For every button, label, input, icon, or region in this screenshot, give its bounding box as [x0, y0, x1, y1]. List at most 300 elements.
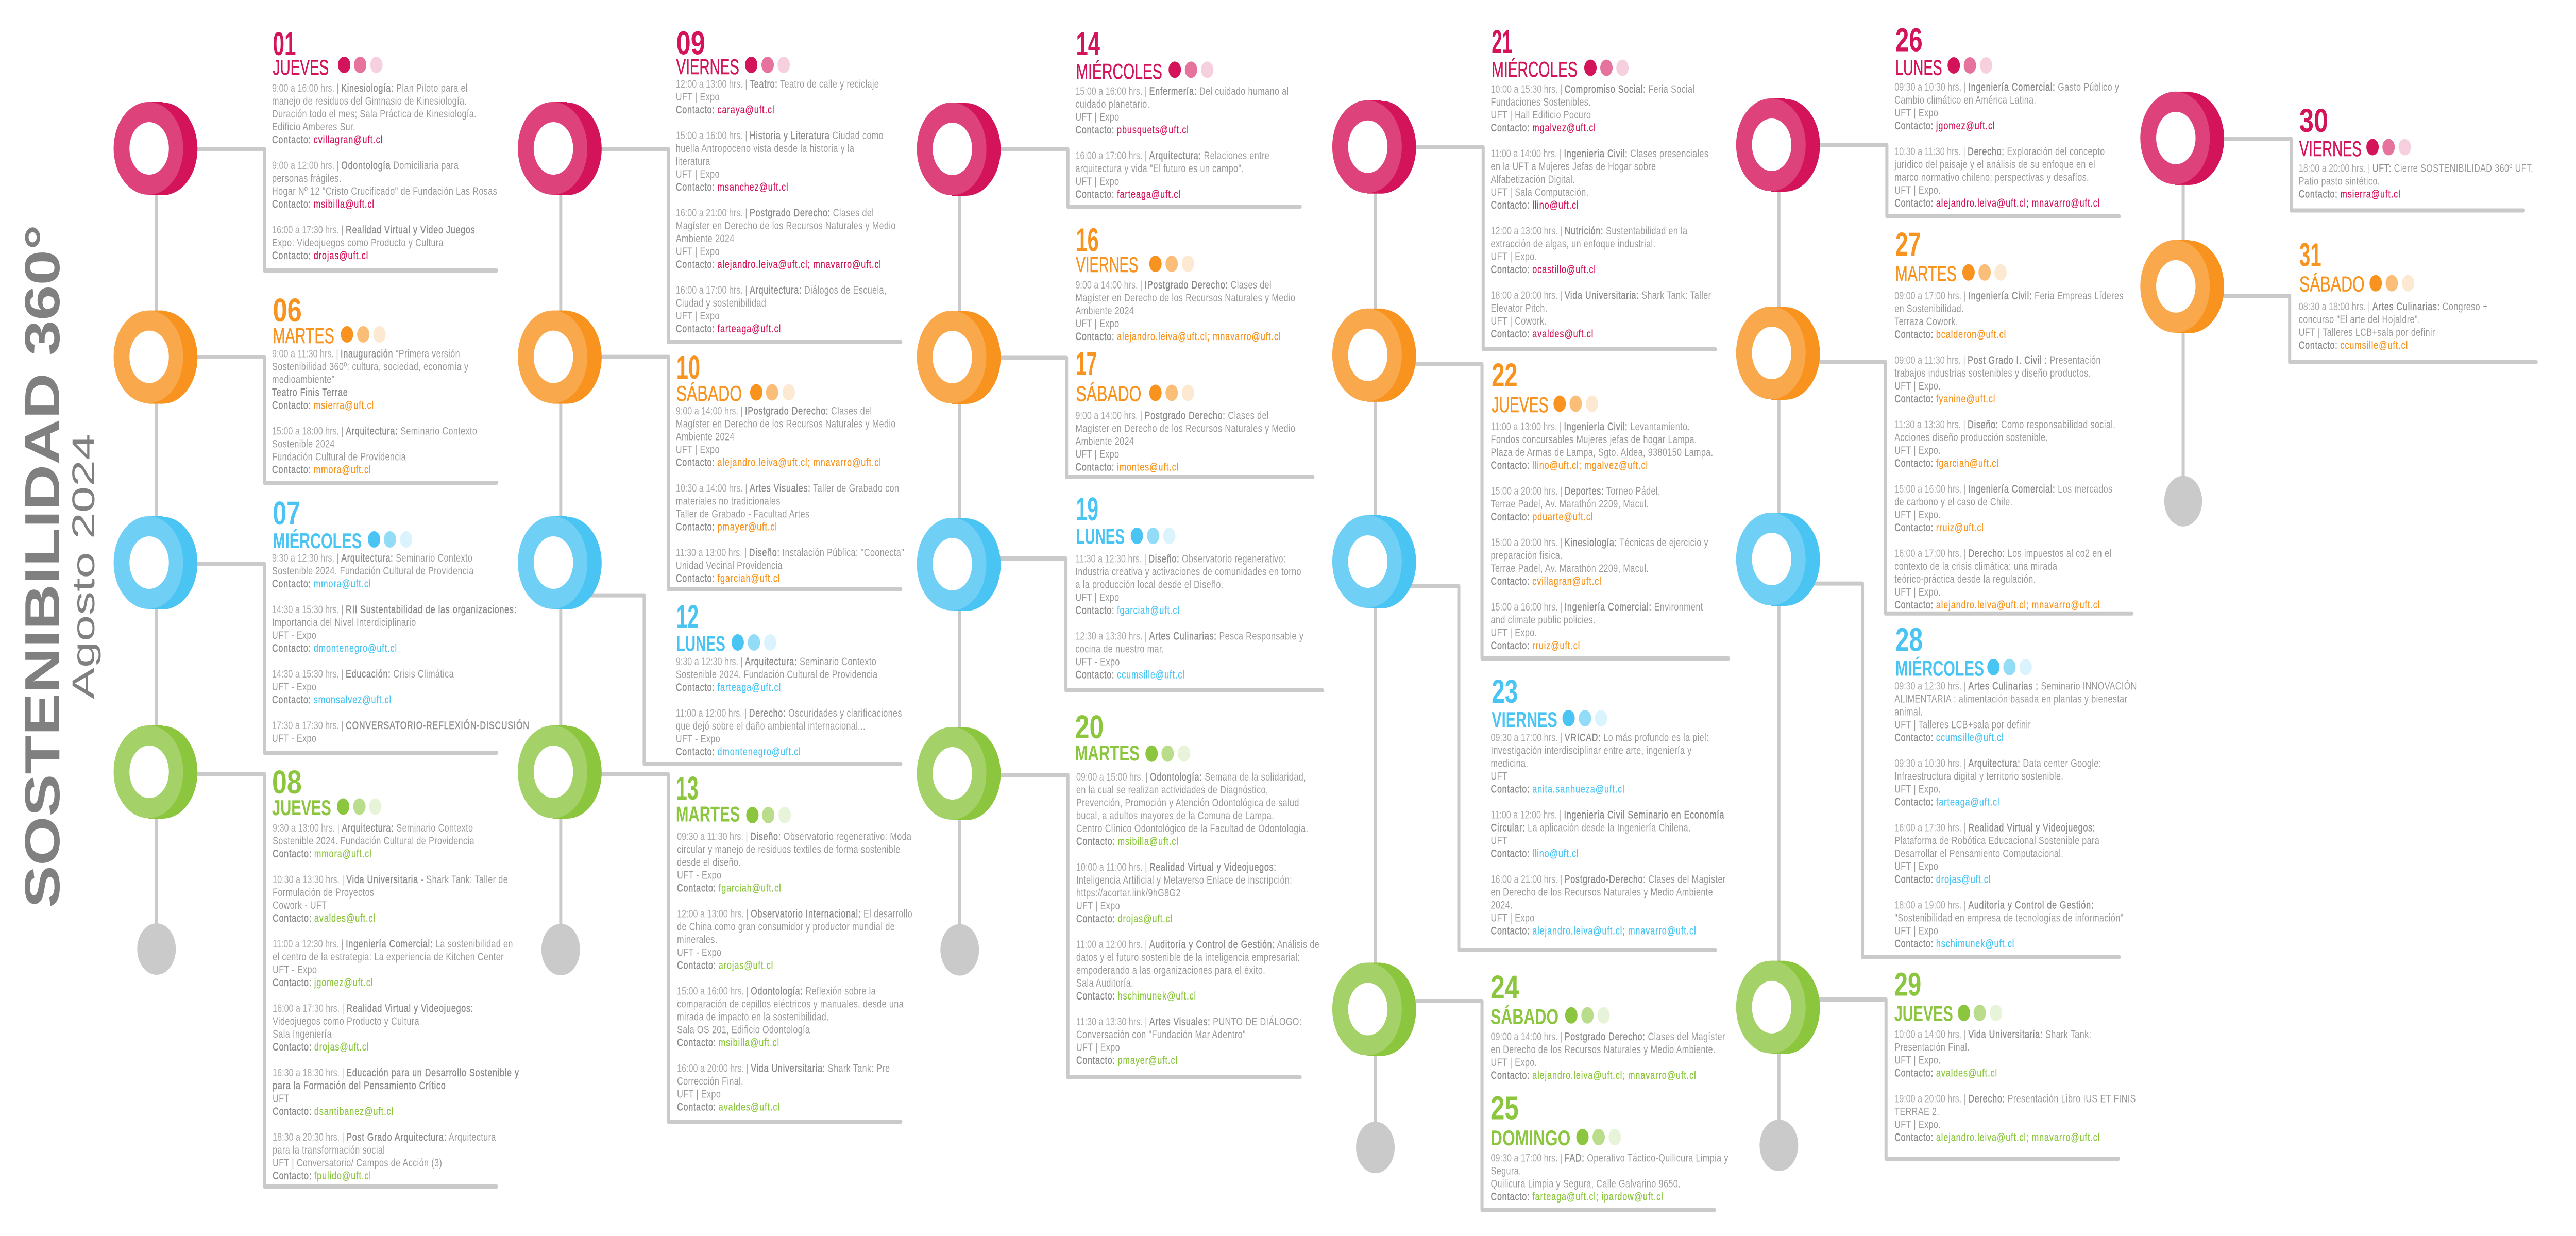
dots	[1947, 57, 1992, 74]
connector: day 12	[580, 596, 901, 764]
date number: 14	[1076, 25, 1100, 62]
schedule text: circular y manejo de residuos textiles de forma sostenible	[677, 843, 901, 856]
schedule text: UFT | Expo.	[1894, 380, 1941, 393]
date number: 28	[1895, 621, 1923, 658]
day 13	[676, 770, 915, 1113]
day 28	[1894, 621, 2140, 950]
day 29	[1894, 966, 2139, 1144]
schedule text: UFT - Expo	[273, 964, 317, 976]
schedule text: Duración todo el mes; Sala Práctica de Kinesiología.	[272, 108, 477, 121]
dots	[1987, 659, 2032, 675]
date number: 26	[1895, 22, 1923, 58]
schedule text: Contacto: hschimunek@uft.cl	[1894, 938, 2014, 950]
schedule text: UFT | Expo.	[1491, 251, 1537, 263]
schedule text: Contacto: anita.sanhueza@uft.cl	[1491, 784, 1625, 795]
date number: 20	[1075, 708, 1104, 746]
schedule text: Cambio climático en América Latina.	[1894, 94, 2036, 107]
schedule text: Conversación con "Fundación Mar Adentro"	[1076, 1029, 1246, 1041]
schedule text: Taller de Grabado - Facultad Artes	[676, 508, 809, 520]
schedule text: huella Antropoceno vista desde la historia y la	[676, 143, 854, 155]
connector: day 07	[185, 564, 497, 753]
schedule text: en Derecho de los Recursos Naturales y Medio Ambiente.	[1491, 1044, 1716, 1056]
schedule text: 12:00 a 13:00 hrs. | Observatorio Internacional: El desarrollo	[677, 908, 912, 920]
day 14	[1075, 25, 1291, 200]
schedule text: 15:00 a 16:00 hrs. | Ingeniería Comercial: Los mercados	[1894, 483, 2112, 496]
schedule text: 12:00 a 13:00 hrs. | Teatro: Teatro de calle y reciclaje	[676, 78, 879, 91]
icon: pink ring	[917, 103, 1001, 196]
schedule text: UFT | Expo	[676, 246, 720, 258]
schedule text: Sostenible 2024. Fundación Cultural de Providencia	[273, 835, 474, 848]
weekday: MARTES	[273, 324, 334, 348]
dots	[1149, 256, 1194, 272]
connector: day 01	[185, 149, 497, 270]
schedule text: Corrección Final.	[677, 1075, 743, 1088]
schedule text: Contacto: alejandro.leiva@uft.cl; mnavarro@uft.cl	[676, 259, 882, 271]
schedule text: en Sostenibilidad.	[1894, 303, 1964, 315]
schedule text: Sala Auditoría.	[1076, 977, 1133, 990]
schedule text: concurso "El arte del Hojaldre".	[2299, 314, 2420, 326]
schedule text: Contacto: alejandro.leiva@uft.cl; mnavarro@uft.cl	[676, 456, 882, 469]
dots	[2369, 275, 2414, 292]
icon: orange ring	[1332, 309, 1416, 402]
schedule text: Presentación Final.	[1894, 1041, 1970, 1054]
icon: green ring	[1332, 962, 1416, 1056]
schedule text: 18:30 a 20:30 hrs. | Post Grado Arquitectura: Arquitectura	[273, 1131, 496, 1144]
dots	[746, 807, 791, 823]
weekday: LUNES	[676, 631, 725, 656]
schedule text: Contacto: farteaga@uft.cl	[676, 682, 781, 694]
schedule text: Contacto: imontes@uft.cl	[1075, 462, 1179, 473]
schedule text: empoderando a las organizaciones para el éxito.	[1076, 964, 1265, 977]
schedule text: Segura.	[1491, 1165, 1521, 1177]
icon: green ring	[917, 727, 1001, 820]
schedule text: marco normativo chileno: perspectivas y desafíos.	[1894, 172, 2089, 184]
schedule text: 9:30 a 13:00 hrs. | Arquitectura: Seminario Contexto	[273, 822, 473, 835]
day 01	[272, 25, 500, 262]
date number: 16	[1076, 222, 1099, 258]
schedule text: Contacto: farteaga@uft.cl	[1075, 189, 1181, 200]
schedule text: UFT | Conversatorio/ Campos de Acción (3)	[273, 1157, 442, 1170]
schedule text: Contacto: alejandro.leiva@uft.cl; mnavarro@uft.cl	[1894, 197, 2100, 210]
day 16	[1075, 222, 1298, 343]
icon: pink ring	[518, 102, 602, 195]
icon: pink ring	[1332, 100, 1416, 194]
dots	[750, 384, 795, 401]
schedule text: en la UFT a Mujeres Jefas de Hogar sobre	[1491, 161, 1656, 173]
weekday: JUEVES	[273, 55, 329, 79]
schedule text: 9:00 a 12:00 hrs. | Odontología Domiciliaria para	[272, 160, 459, 172]
schedule text: 10:00 a 15:30 hrs. | Compromiso Social: Feria Social	[1491, 83, 1694, 96]
weekday: DOMINGO	[1490, 1126, 1570, 1150]
schedule text: 09:30 a 11:30 hrs. | Diseño: Observatorio regenerativo: Moda	[677, 831, 911, 843]
schedule text: Industria creativa y activaciones de comunidades en torno	[1075, 566, 1301, 578]
schedule text: UFT | Expo	[677, 1088, 721, 1100]
weekday: VIERNES	[1076, 252, 1138, 277]
schedule text: Contacto: mgalvez@uft.cl	[1491, 122, 1596, 134]
weekday: LUNES	[1076, 524, 1125, 549]
schedule text: 15:00 a 20:00 hrs. | Kinesiología: Técnicas de ejercicio y	[1491, 537, 1708, 549]
schedule text: minerales.	[677, 934, 718, 946]
schedule text: Contacto: rruiz@uft.cl	[1491, 640, 1580, 652]
date number: 30	[2299, 102, 2328, 139]
connector: day 21	[1406, 147, 1716, 349]
schedule text: Contacto: drojas@uft.cl	[272, 250, 368, 262]
schedule text: arquitectura y vida "El futuro es un campo".	[1075, 163, 1244, 175]
schedule text: 2024.	[1491, 900, 1513, 911]
schedule text: 14:30 a 15:30 hrs. | Educación: Crisis Climática	[272, 668, 454, 681]
connector: day 30	[2214, 139, 2523, 210]
schedule text: 16:00 a 17:30 hrs. | Realidad Virtual y Video Juegos	[272, 224, 475, 236]
schedule text: 16:00 a 21:00 hrs. | Postgrado-Derecho: Clases del Magíster	[1491, 874, 1726, 886]
weekday: SÁBADO	[1490, 1004, 1558, 1029]
schedule text: UFT | Expo	[676, 444, 720, 456]
schedule text: 11:00 a 12:00 hrs. | Derecho: Oscuridades y clarificaciones	[676, 707, 902, 720]
schedule text: UFT - Expo	[1075, 656, 1120, 668]
date number: 08	[272, 764, 302, 801]
schedule text: Fundación Cultural de Providencia	[272, 451, 406, 463]
schedule text: 16:00 a 21:00 hrs. | Postgrado Derecho: Clases del	[676, 207, 874, 219]
schedule text: 16:00 a 17:30 hrs. | Realidad Virtual y Videojuegos:	[273, 1003, 473, 1015]
timeline column 3	[917, 103, 1323, 1077]
schedule text: UFT | Sala Computación.	[1491, 187, 1588, 199]
date number: 19	[1076, 490, 1098, 528]
weekday: MARTES	[1895, 261, 1957, 286]
schedule text: Infraestructura digital y territorio sostenible.	[1894, 770, 2063, 783]
day 26	[1894, 22, 2122, 210]
schedule text: Magíster en Derecho de los Recursos Naturales y Medio	[676, 418, 896, 430]
icon: blue ring	[518, 516, 602, 609]
day 06	[272, 292, 480, 476]
icon: blue ring	[917, 518, 1001, 611]
day 30	[2299, 102, 2536, 200]
schedule text: UFT | Expo	[1076, 1042, 1120, 1054]
schedule text: jurídico del paisaje y el análisis de su enfoque en el	[1894, 159, 2095, 171]
icon: orange ring	[2140, 240, 2224, 333]
schedule text: 18:00 a 19:00 hrs. | Auditoría y Control de Gestión:	[1894, 899, 2094, 911]
schedule text: UFT - Expo	[677, 946, 721, 959]
schedule text: UFT | Expo.	[1894, 586, 1941, 599]
schedule text: literatura	[676, 156, 710, 168]
timeline column 2	[518, 102, 901, 1122]
connector: day 29	[1808, 1000, 2119, 1159]
schedule text: para la transformación social	[273, 1144, 385, 1157]
weekday: VIERNES	[1492, 707, 1557, 732]
schedule text: UFT | Expo	[1894, 860, 1938, 873]
schedule text: Contacto: msibilla@uft.cl	[1076, 836, 1179, 848]
weekday: SÁBADO	[2299, 272, 2365, 296]
schedule text: Contacto: hschimunek@uft.cl	[1076, 990, 1196, 1003]
schedule text: 9:30 a 12:30 hrs. | Arquitectura: Seminario Contexto	[676, 656, 876, 668]
schedule text: Contacto: alejandro.leiva@uft.cl; mnavarro@uft.cl	[1894, 599, 2100, 612]
schedule text: UFT | Talleres LCB+sala por definir	[2299, 327, 2435, 339]
schedule text: Contacto: msanchez@uft.cl	[676, 181, 789, 194]
day 22	[1491, 357, 1716, 652]
schedule text: datos y el futuro sostenible de la inteligencia empresarial:	[1076, 952, 1300, 964]
schedule text: 09:00 a 14:00 hrs. | Postgrado Derecho: Clases del Magíster	[1491, 1031, 1725, 1043]
schedule text: Ambiente 2024	[1075, 436, 1134, 448]
icon: end node	[1759, 1120, 1798, 1171]
schedule text: Prevención, Promoción y Atención Odontológica de salud	[1076, 797, 1299, 809]
schedule text: 18:00 a 20:00 hrs. | UFT: Cierre SOSTENIBILIDAD 360º UFT.	[2299, 163, 2533, 175]
schedule text: TERRAE 2.	[1894, 1106, 1939, 1118]
schedule text: 12:30 a 13:30 hrs. | Artes Culinarias: Pesca Responsable y	[1075, 630, 1303, 642]
schedule text: UFT - Expo	[676, 733, 720, 746]
icon: blue ring	[114, 516, 197, 609]
schedule text: medicina.	[1491, 758, 1528, 770]
schedule text: Contacto: jgomez@uft.cl	[1894, 120, 1995, 132]
weekday: MIÉRCOLES	[1076, 59, 1162, 83]
day 21	[1491, 23, 1714, 341]
schedule text: 11:30 a 13:30 hrs. | Artes Visuales: PUNTO DE DIÁLOGO:	[1076, 1016, 1302, 1028]
schedule text: Contacto: fyanine@uft.cl	[1894, 393, 1995, 405]
schedule text: 09:00 a 17:00 hrs. | Ingeniería Civil: Feria Empreas Líderes	[1894, 290, 2124, 302]
schedule text: 11:00 a 12:00 hrs. | Auditoría y Control de Gestión: Análisis de	[1076, 939, 1319, 951]
schedule text: Contacto: llino@uft.cl; mgalvez@uft.cl	[1491, 460, 1648, 472]
schedule text: mirada de impacto en la sostenibilidad.	[677, 1011, 829, 1023]
date number: 07	[273, 495, 300, 532]
schedule text: Contacto: avaldes@uft.cl	[1491, 328, 1594, 341]
connector: day 10	[591, 357, 901, 589]
schedule text: UFT | Cowork.	[1491, 315, 1547, 328]
icon: orange ring	[917, 311, 1001, 404]
schedule text: teórico-práctica desde la regulación.	[1894, 573, 2036, 586]
schedule text: Contacto: alejandro.leiva@uft.cl; mnavarro@uft.cl	[1894, 1131, 2100, 1144]
schedule text: 09:30 a 10:30 hrs. | Ingeniería Comercial: Gasto Público y	[1894, 81, 2119, 94]
schedule text: de China como gran consumidor y productor mundial de	[677, 921, 895, 933]
schedule text: 08:30 a 18:00 hrs. | Artes Culinarias: Congreso +	[2299, 301, 2488, 313]
date number: 22	[1492, 357, 1518, 394]
schedule text: 9:30 a 12:30 hrs. | Arquitectura: Seminario Contexto	[272, 552, 472, 565]
schedule text: UFT | Expo	[676, 168, 720, 181]
schedule text: UFT | Expo	[1894, 107, 1938, 120]
connector: day 08	[185, 774, 497, 1187]
schedule text: Ambiente 2024	[676, 431, 735, 443]
schedule text: Elevator Pitch.	[1491, 302, 1548, 315]
date number: 24	[1490, 969, 1519, 1006]
schedule text: Contacto: avaldes@uft.cl	[1894, 1067, 1997, 1079]
schedule text: 15:00 a 20:00 hrs. | Deportes: Torneo Pádel.	[1491, 485, 1660, 498]
schedule text: animal.	[1894, 706, 1923, 718]
icon: green ring	[114, 725, 197, 819]
schedule text: 15:00 a 16:00 hrs. | Enfermería: Del cuidado humano al	[1075, 86, 1289, 97]
weekday: MIÉRCOLES	[1895, 656, 1984, 681]
schedule text: Expo: Videojuegos como Producto y Cultura	[272, 237, 444, 249]
schedule text: Contacto: avaldes@uft.cl	[677, 1101, 780, 1113]
schedule text: 10:30 a 14:00 hrs. | Artes Visuales: Taller de Grabado con	[676, 482, 899, 495]
date number: 10	[676, 349, 700, 386]
date number: 01	[273, 25, 296, 62]
schedule text: UFT | Expo.	[1894, 445, 1941, 457]
schedule text: 18:00 a 20:00 hrs. | Vida Universitaria: Shark Tank: Taller	[1491, 290, 1711, 302]
date number: 09	[676, 25, 705, 61]
weekday: VIERNES	[2299, 137, 2362, 161]
schedule text: Contacto: llino@uft.cl	[1491, 848, 1579, 860]
day 25	[1490, 1090, 1731, 1203]
schedule text: Contacto: mmora@uft.cl	[272, 464, 371, 476]
date number: 13	[676, 770, 699, 807]
icon: green ring	[1736, 961, 1820, 1054]
schedule text: 11:00 a 12:00 hrs. | Ingeniería Civil Seminario en Economía	[1491, 809, 1724, 821]
connector: day 23	[1399, 586, 1716, 950]
schedule text: Magíster en Derecho de los Recursos Naturales y Medio	[1075, 292, 1295, 304]
schedule text: Centro Clínico Odontológico de la Facultad de Odontología.	[1076, 823, 1309, 835]
schedule text: Contacto: mmora@uft.cl	[273, 848, 372, 860]
schedule text: UFT | Talleres LCB+sala por definir	[1894, 719, 2031, 731]
timeline column 1	[114, 102, 497, 1187]
title: SOSTENIBILIDAD 360°	[14, 225, 70, 908]
icon: orange ring	[518, 311, 602, 404]
dots	[2366, 139, 2411, 156]
schedule text: Contacto: msierra@uft.cl	[2299, 189, 2401, 200]
schedule text: Contacto: pbusquets@uft.cl	[1075, 124, 1189, 136]
schedule text: Acciones diseño producción sostenible.	[1894, 432, 2048, 444]
schedule text: 19:00 a 20:00 hrs. | Derecho: Presentación Libro IUS ET FINIS	[1894, 1093, 2136, 1105]
connector: day 31	[2214, 296, 2536, 362]
schedule text: Contacto: drojas@uft.cl	[1076, 913, 1173, 925]
schedule text: Magíster en Derecho de los Recursos Naturales y Medio	[676, 220, 896, 232]
day 10	[676, 349, 907, 585]
schedule text: https://acortar.link/9hG8G2	[1076, 887, 1181, 900]
dots	[368, 531, 412, 548]
schedule text: UFT | Expo.	[1894, 509, 1941, 521]
schedule text: Contacto: rruiz@uft.cl	[1894, 522, 1984, 534]
schedule text: bucal, a adultos mayores de la Comuna de Lampa.	[1076, 810, 1274, 822]
day 23	[1491, 673, 1728, 937]
schedule text: ALIMENTARIA : alimentación basada en plantas y bienestar	[1894, 693, 2127, 705]
schedule text: materiales no tradicionales	[676, 495, 781, 507]
schedule text: Quilicura Limpia y Segura, Calle Galvarino 9650.	[1491, 1178, 1681, 1190]
schedule text: Contacto: alejandro.leiva@uft.cl; mnavarro@uft.cl	[1491, 925, 1697, 937]
schedule text: Plaza de Armas de Lampa, Sgto. Aldea, 9380150 Lampa.	[1491, 447, 1714, 459]
date number: 17	[1076, 345, 1097, 382]
icon: blue ring	[1736, 513, 1820, 606]
schedule text: Contacto: caraya@uft.cl	[676, 104, 775, 116]
schedule text: "Sostenibilidad en empresa de tecnologías de información"	[1894, 912, 2124, 924]
icon: end node	[137, 923, 176, 975]
schedule text: 12:00 a 13:00 hrs. | Nutrición: Sustentabilidad en la	[1491, 225, 1688, 238]
schedule text: 09:00 a 15:00 hrs. | Odontología: Semana de la solidaridad,	[1076, 771, 1306, 784]
schedule text: Sostenible 2024	[272, 438, 335, 450]
weekday: MIÉRCOLES	[273, 529, 362, 553]
connector: day 24 and 25	[1406, 1001, 1715, 1210]
schedule text: en Derecho de los Recursos Naturales y Medio Ambiente	[1491, 887, 1713, 899]
schedule text: Terrae Padel, Av. Marathón 2209, Macul.	[1491, 498, 1649, 511]
connector: day 22	[1406, 364, 1728, 658]
schedule text: UFT	[273, 1093, 290, 1105]
schedule text: Contacto: cvillagran@uft.cl	[1491, 575, 1602, 588]
schedule text: Contacto: bcalderon@uft.cl	[1894, 329, 2006, 341]
icon: end node	[940, 924, 979, 976]
schedule text: Videojuegos como Producto y Cultura	[273, 1015, 419, 1028]
schedule text: contexto de la crisis climática: una mirada	[1894, 561, 2057, 573]
schedule text: 09:30 a 17:00 hrs. | VRICAD: Lo más profundo es la piel:	[1491, 732, 1709, 744]
date number: 12	[676, 598, 699, 635]
schedule text: Contacto: msibilla@uft.cl	[272, 198, 375, 211]
schedule text: UFT	[1491, 835, 1507, 847]
schedule text: Contacto: fpulido@uft.cl	[273, 1170, 371, 1182]
schedule text: Contacto: fgarciah@uft.cl	[1075, 604, 1180, 617]
schedule text: UFT | Hall Edificio Pocuro	[1491, 109, 1591, 122]
dots	[1563, 710, 1607, 726]
date number: 06	[273, 292, 302, 329]
weekday: JUEVES	[1894, 1001, 1953, 1026]
schedule text: Sala OS 201, Edificio Odontología	[677, 1024, 810, 1036]
schedule text: and climate public policies.	[1491, 614, 1596, 627]
day 31	[2299, 236, 2490, 352]
schedule text: UFT - Expo	[272, 681, 316, 693]
schedule text: Contacto: ccumsille@uft.cl	[1894, 732, 2004, 744]
date number: 21	[1492, 23, 1513, 60]
schedule text: Hogar Nº 12 "Cristo Crucificado" de Fundación Las Rosas	[272, 185, 497, 198]
schedule text: Contacto: ccumsille@uft.cl	[1075, 669, 1185, 681]
schedule text: Desarrollar el Pensamiento Computacional.	[1894, 848, 2063, 860]
schedule text: extracción de algas, un enfoque industrial.	[1491, 238, 1655, 250]
schedule text: Unidad Vecinal Providencia	[676, 560, 783, 572]
schedule text: UFT | Expo	[1894, 925, 1938, 937]
schedule text: Formulación de Proyectos	[273, 887, 374, 899]
weekday: MARTES	[676, 802, 740, 826]
schedule text: Contacto: dmontenegro@uft.cl	[272, 642, 397, 655]
schedule text: Contacto: pduarte@uft.cl	[1491, 511, 1593, 523]
schedule text: Contacto: pmayer@uft.cl	[676, 521, 777, 533]
schedule text: 9:00 a 11:30 hrs. | Inauguración “Primera versión	[272, 348, 460, 360]
dots	[1565, 1007, 1610, 1024]
weekday: SÁBADO	[676, 381, 742, 405]
icon: end node	[2164, 476, 2202, 527]
schedule text: Contacto: avaldes@uft.cl	[273, 912, 376, 925]
schedule text: UFT | Expo.	[1491, 627, 1537, 639]
date number: 27	[1895, 226, 1921, 263]
icon: orange ring	[114, 311, 197, 404]
connector: day 19	[989, 558, 1323, 690]
schedule text: cocina de nuestro mar.	[1075, 643, 1164, 655]
connector: day 26	[1808, 145, 2119, 216]
schedule text: Contacto: arojas@uft.cl	[677, 959, 773, 972]
schedule text: UFT | Expo.	[1894, 1054, 1941, 1066]
schedule text: trabajos industrias sostenibles y diseño productos.	[1894, 367, 2091, 380]
schedule text: manejo de residuos del Gimnasio de Kinesiología.	[272, 95, 467, 108]
dots	[1962, 264, 2007, 281]
day 20	[1075, 708, 1322, 1067]
schedule text: 11:00 a 14:00 hrs. | Ingeniería Civil: Clases presenciales	[1491, 148, 1708, 160]
dots	[1145, 746, 1190, 762]
icon: pink ring	[114, 102, 197, 195]
weekday: LUNES	[1895, 55, 1942, 79]
schedule text: Investigación interdisciplinar entre arte, ingeniería y	[1491, 745, 1692, 757]
schedule text: Terrae Padel, Av. Marathón 2209, Macul.	[1491, 563, 1649, 575]
schedule text: personas frágiles.	[272, 173, 342, 185]
schedule text: 14:30 a 15:30 hrs. | RII Sustentabilidad de las organizaciones:	[272, 604, 517, 616]
schedule text: Cowork - UFT	[273, 900, 327, 912]
schedule text: 16:00 a 17:00 hrs. | Derecho: Los impuestos al co2 en el	[1894, 548, 2111, 560]
schedule text: 9:00 a 14:00 hrs. | Postgrado Derecho: Clases del	[1075, 410, 1269, 422]
schedule text: el centro de la estrategia: La experiencia de Kitchen Center	[273, 951, 504, 963]
schedule text: Contacto: fgarciah@uft.cl	[676, 572, 780, 585]
weekday: SÁBADO	[1076, 381, 1141, 406]
schedule text: Contacto: cvillagran@uft.cl	[272, 134, 383, 146]
schedule text: Fondos concursables Mujeres jefas de hogar Lampa.	[1491, 434, 1697, 446]
schedule text: Contacto: alejandro.leiva@uft.cl; mnavarro@uft.cl	[1491, 1070, 1697, 1082]
schedule text: Contacto: llino@uft.cl	[1491, 199, 1579, 212]
schedule text: UFT | Expo	[1075, 318, 1120, 330]
schedule text: que dejó sobre el daño ambiental internacional...	[676, 720, 866, 733]
schedule text: Ciudad y sostenibilidad	[676, 297, 766, 310]
schedule text: UFT | Expo.	[1894, 1119, 1941, 1131]
date number: 25	[1490, 1090, 1519, 1126]
schedule text: Contacto: farteaga@uft.cl	[676, 323, 781, 335]
weekday: JUEVES	[1492, 393, 1549, 417]
dots	[1584, 60, 1629, 76]
